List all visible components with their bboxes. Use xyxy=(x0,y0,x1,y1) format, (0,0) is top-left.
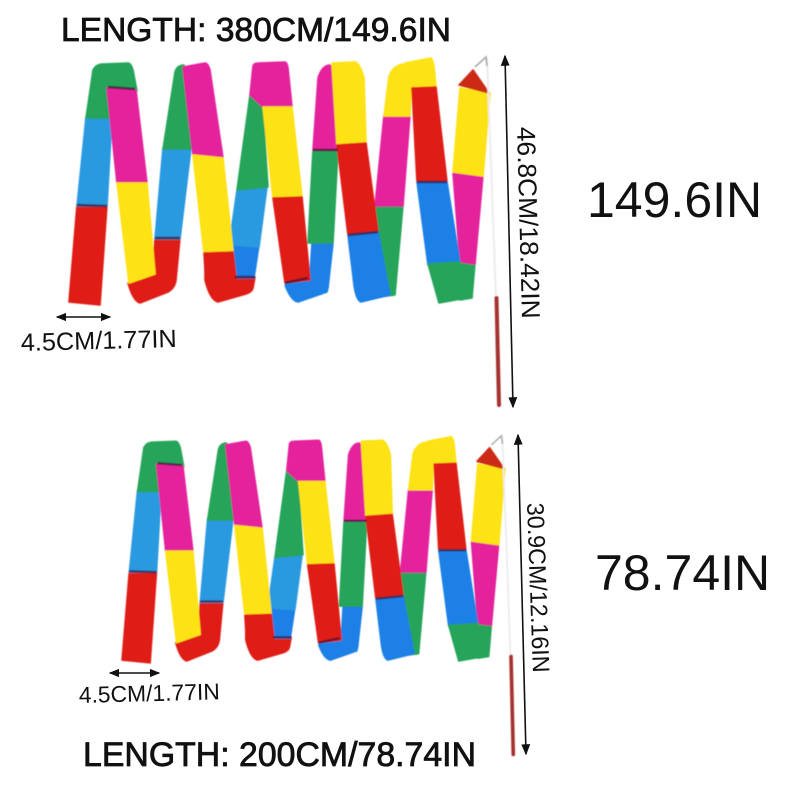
arrow: height of long ribbon xyxy=(505,56,513,407)
rising strips, behind xyxy=(69,64,490,305)
dark seams between colour bands xyxy=(77,87,447,283)
short ribbon with stick xyxy=(122,436,513,754)
height label: 46.8CM/18.42IN xyxy=(511,126,546,319)
title: length of long ribbon: LENGTH: 380CM/149.6IN xyxy=(61,12,451,49)
arrow: height of short ribbon xyxy=(518,435,526,754)
big size label: 149.6IN: 149.6IN xyxy=(587,172,762,228)
width label short: 4.5CM/1.77IN xyxy=(78,678,220,708)
stick xyxy=(475,57,499,405)
width label: 4.5CM/1.77IN xyxy=(20,325,177,357)
descending strips and folds, in front xyxy=(103,58,489,303)
big size label: 78.74IN: 78.74IN xyxy=(595,545,770,601)
arrow: width of short ribbon xyxy=(110,672,159,674)
long ribbon with stick xyxy=(69,57,499,405)
title: length of short ribbon: LENGTH: 200CM/78.74IN xyxy=(83,736,476,774)
arrow: width of long ribbon xyxy=(57,316,110,318)
height label short: 30.9CM/12.16IN xyxy=(521,502,554,673)
